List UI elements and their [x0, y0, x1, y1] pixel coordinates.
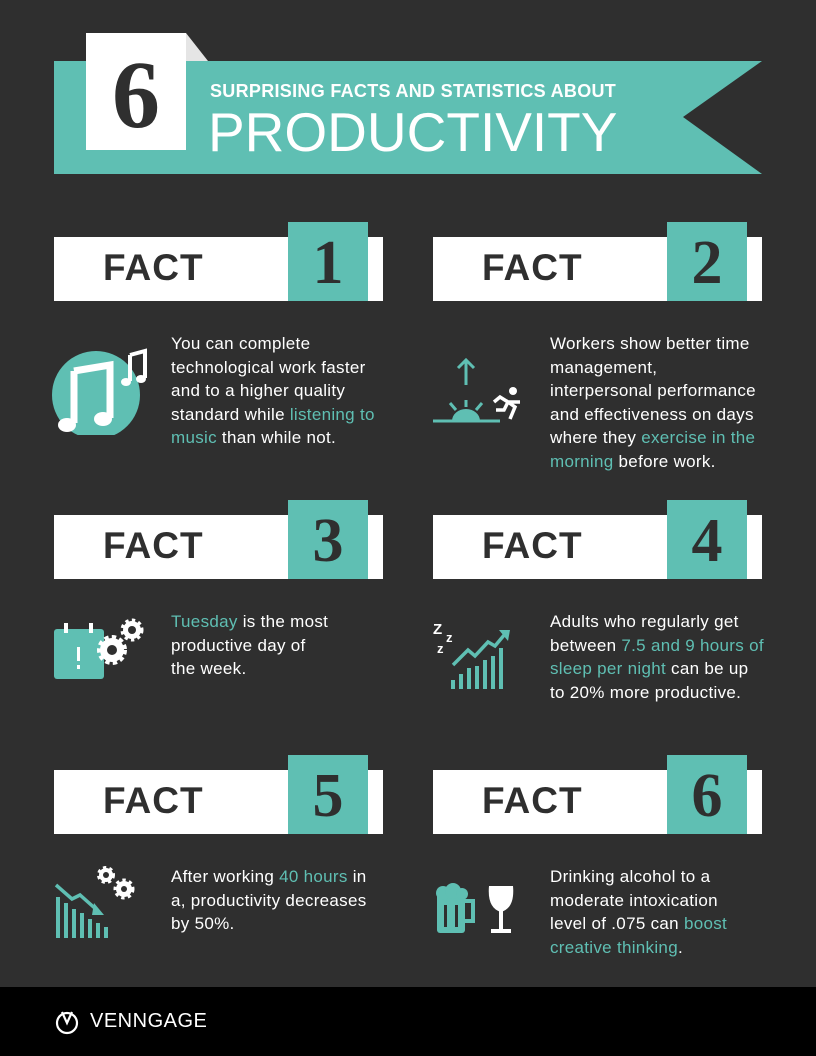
title: PRODUCTIVITY: [208, 101, 617, 163]
fact 5: [54, 770, 383, 834]
text fact 4: to 20% more productive.: [550, 682, 741, 702]
text fact 4: between 7.5 and 9 hours of: [550, 636, 764, 654]
fact 2: FACT: [482, 247, 583, 288]
text fact 6: [550, 867, 727, 956]
text fact 5: After working 40 hours in: [171, 867, 367, 886]
text fact 1: standard while listening to: [171, 404, 375, 424]
fact 3: [54, 515, 383, 579]
fact 1: FACT: [103, 247, 204, 288]
text fact 4: [550, 612, 764, 702]
icon: sleep chart: Z: [433, 621, 442, 638]
fact 2: [433, 237, 762, 301]
text fact 6: level of .075 can boost: [550, 914, 727, 933]
icon: music: [52, 348, 147, 435]
text fact 2: [550, 334, 756, 470]
fact 1: 1: [312, 229, 344, 297]
text fact 6: Drinking alcohol to a: [550, 867, 710, 886]
text fact 2: interpersonal performance: [550, 381, 756, 400]
text fact 4: Adults who regularly get: [550, 612, 739, 631]
text fact 1: music than while not.: [171, 428, 336, 447]
icon: beer and wine: [436, 883, 514, 933]
text fact 1: technological work faster: [171, 358, 366, 376]
text fact 6: creative thinking.: [550, 938, 683, 956]
icon: calendar gears: [54, 618, 144, 679]
text fact 5: a, productivity decreases: [171, 890, 367, 910]
icon: sleep chart: [433, 621, 510, 689]
icon: sunrise runner: [433, 358, 520, 422]
fact 3: 3: [312, 507, 344, 575]
big number 6: 6: [112, 41, 160, 148]
fact 6: FACT: [482, 780, 583, 821]
text fact 3: [171, 612, 328, 678]
text fact 2: Workers show better time: [550, 334, 750, 353]
text fact 2: and effectiveness on days: [550, 404, 754, 424]
fact 4: FACT: [482, 525, 583, 566]
logo text: VENNGAGE: [90, 1010, 207, 1032]
icon: sleep chart: z: [437, 641, 444, 656]
text fact 5: by 50%.: [171, 914, 235, 933]
fact 5: FACT: [103, 780, 204, 821]
text fact 3: productive day of: [171, 636, 306, 654]
text fact 1: [171, 334, 375, 447]
text fact 3: Tuesday is the most: [171, 612, 328, 631]
text fact 4: sleep per night can be up: [550, 659, 748, 678]
fact 1: [54, 237, 383, 301]
text fact 2: management,: [550, 358, 657, 376]
fact 4: [433, 515, 762, 579]
text fact 2: morning before work.: [550, 452, 716, 470]
icon: decline gears: [54, 866, 134, 938]
icon: sleep chart: z: [446, 630, 453, 645]
fact 4: 4: [692, 507, 722, 575]
fact 3: FACT: [103, 525, 204, 566]
text fact 3: the week.: [171, 659, 246, 678]
fact 2: 2: [692, 229, 722, 297]
fact 6: [433, 770, 762, 834]
text fact 1: You can complete: [171, 334, 310, 353]
subtitle: SURPRISING FACTS AND STATISTICS ABOUT: [210, 81, 616, 101]
text fact 1: and to a higher quality: [171, 381, 345, 400]
fact 6: 6: [692, 762, 722, 830]
text fact 6: moderate intoxication: [550, 890, 718, 910]
logo icon: [56, 1012, 78, 1034]
fact 5: 5: [312, 762, 344, 830]
footer: [0, 987, 816, 1056]
text fact 2: where they exercise in the: [550, 428, 755, 447]
text fact 5: [171, 867, 367, 933]
header banner: [54, 33, 762, 174]
